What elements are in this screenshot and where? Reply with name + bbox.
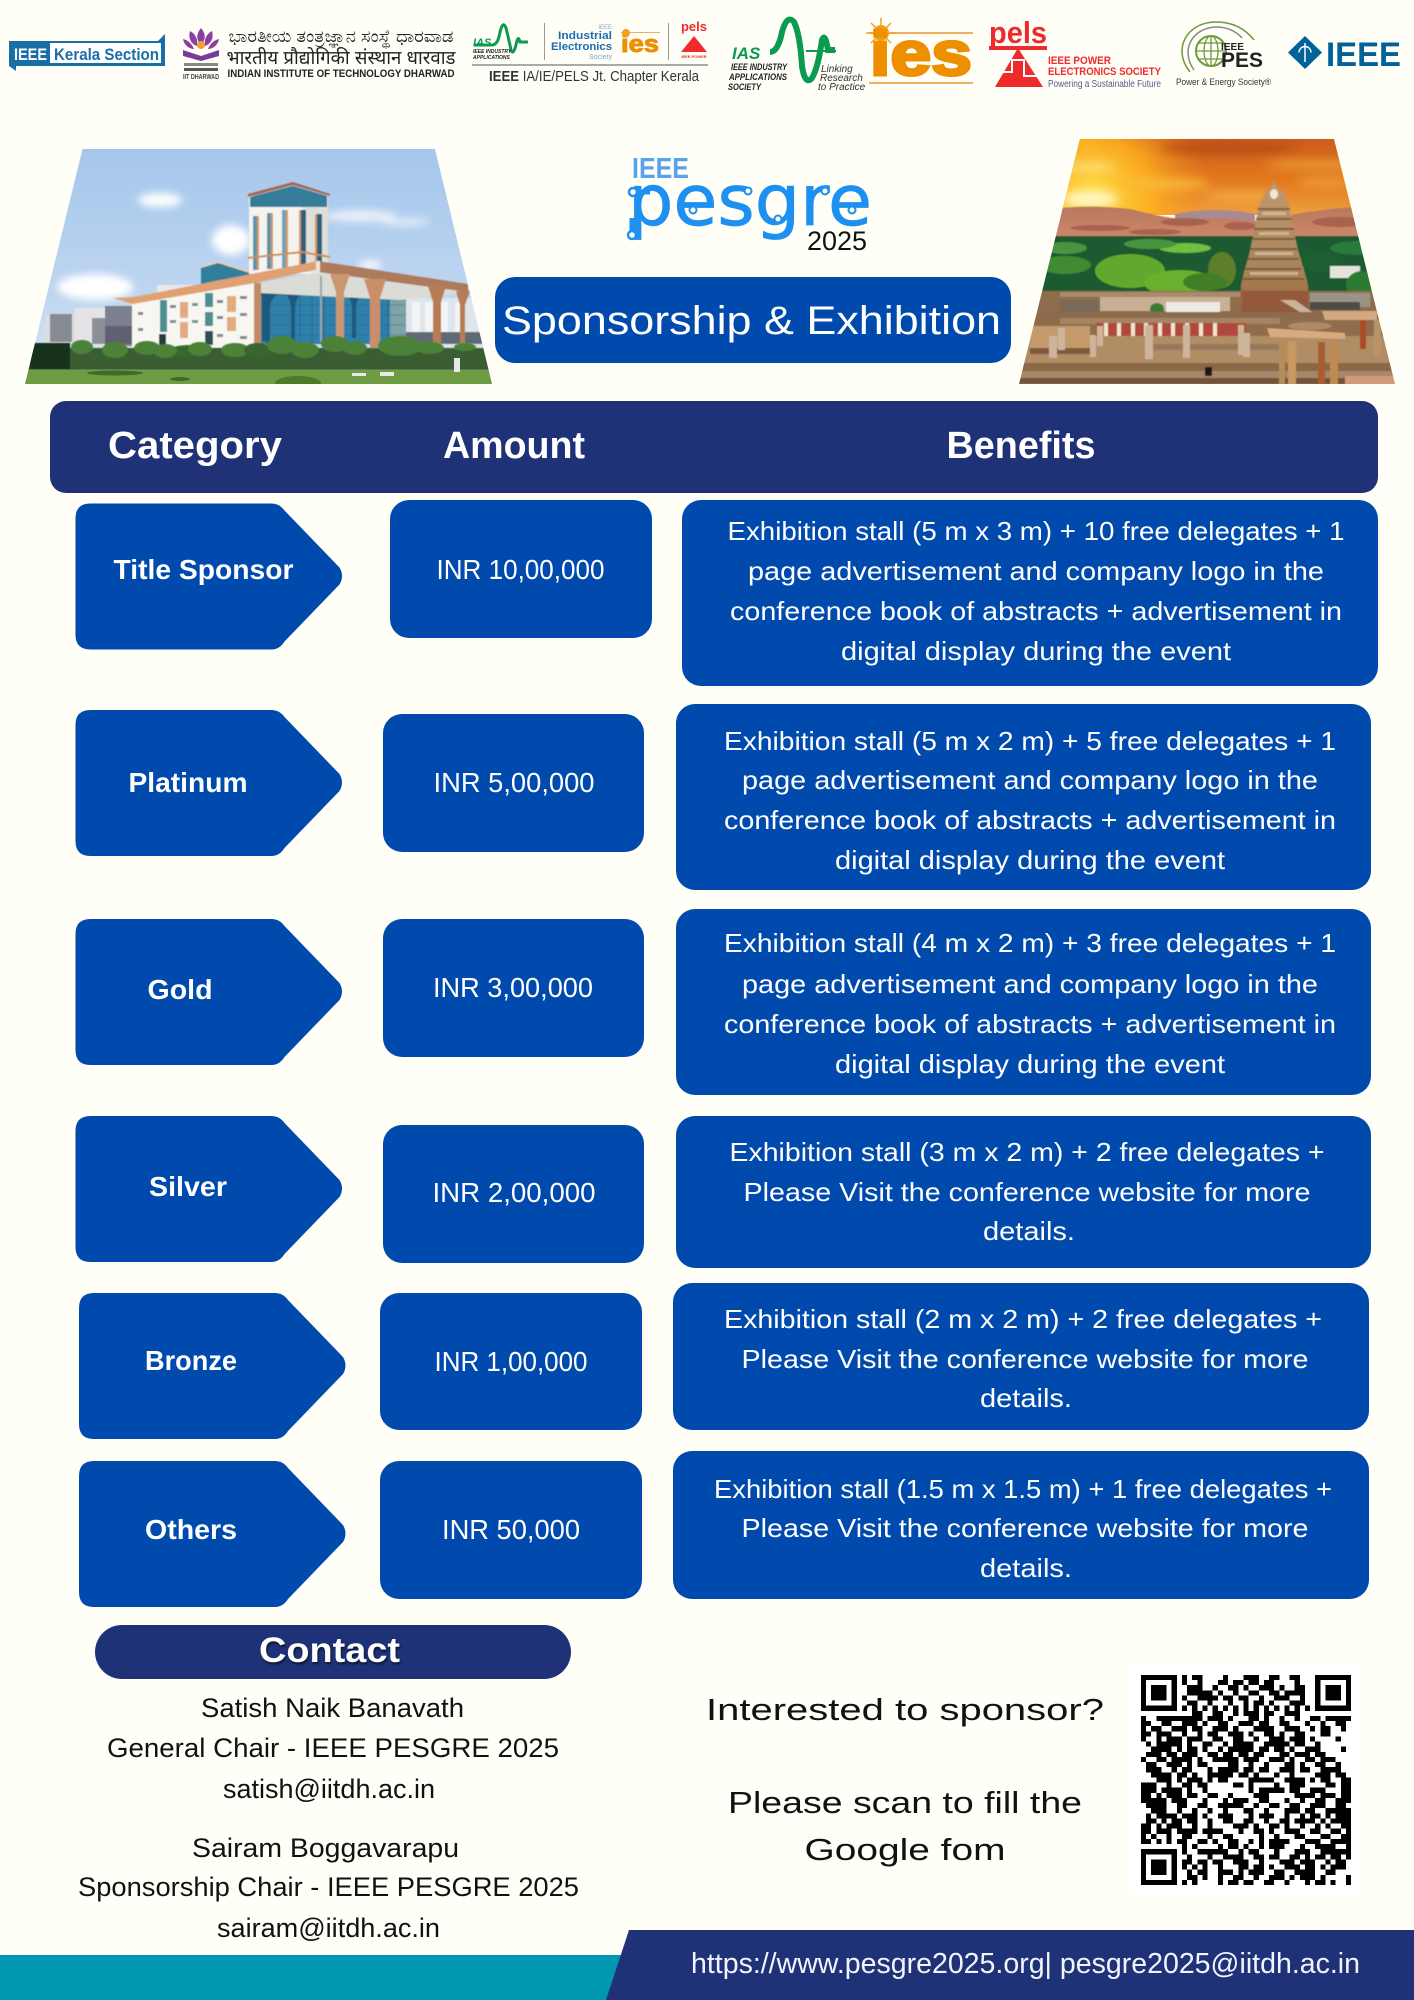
- category badge: Others: Others: [145, 1514, 237, 1545]
- row: Title Sponsor: [76, 500, 1378, 686]
- town and walls: [1033, 290, 1384, 337]
- logo: IEEE IA/IE/PELS Jt. Chapter Kerala: Industrial: [558, 30, 612, 42]
- logo: IIT Dharwad: भारतीय प्रौद्योगिकी संस्थान धारवाड: [226, 46, 456, 69]
- logo: IEEE IA/IE/PELS Jt. Chapter Kerala: IEEE IA/IE/PELS Jt. Chapter Kerala: [489, 68, 700, 85]
- amount: INR 50,000: INR 50,000: [442, 1514, 580, 1545]
- category badge: Title Sponsor: [76, 504, 342, 650]
- benefits: Title Sponsor: page advertisement and company logo in the: [748, 556, 1324, 586]
- canopy underside: [255, 272, 468, 300]
- amount: INR 1,00,000: [380, 1293, 642, 1430]
- benefits: Gold: Exhibition stall (4 m x 2 m) + 3 free delegates + 1: [724, 928, 1336, 958]
- logo: IEEE PESGRE 2025: 2025: [807, 226, 867, 256]
- row: Silver: [76, 1116, 1371, 1268]
- category badge: Platinum: Platinum: [128, 767, 248, 798]
- logo: IEEE PESGRE 2025: IEEE: [632, 153, 689, 185]
- contact: Satish Naik Banavath: General Chair - IEEE PESGRE 2025: [107, 1733, 559, 1763]
- category badge: Bronze: [79, 1293, 346, 1439]
- category badge: Bronze: Bronze: [145, 1345, 237, 1376]
- amount: INR 50,000: [380, 1461, 642, 1599]
- amount: INR 10,00,000: [390, 500, 652, 638]
- benefits: Platinum: Exhibition stall (5 m x 2 m) + 5 free delegates + 1: [724, 726, 1336, 756]
- benefits: Title Sponsor: conference book of abstracts + advertisement in: [730, 596, 1342, 626]
- logo: IEEE IA/IE/PELS Jt. Chapter Kerala: APPLICATIONS: [472, 55, 511, 61]
- table header bar: [50, 401, 1378, 493]
- benefits: Others: [673, 1451, 1369, 1599]
- benefits: Platinum: digital display during the event: [835, 845, 1226, 875]
- columns: [330, 274, 350, 345]
- logo: IEEE IA/IE/PELS Jt. Chapter Kerala: IEEE: [598, 25, 612, 31]
- logo: IEEE IA/IE/PELS Jt. Chapter Kerala: ies: [621, 31, 659, 58]
- logo: IEEE Kerala Section: IEEE: [14, 45, 47, 64]
- logo: IIT Dharwad: ಭಾರತೀಯ ತಂತ್ರಜ್ಞಾನ ಸಂಸ್ಥೆ ಧಾರವಾಡ: [228, 27, 454, 50]
- category badge: Gold: Gold: [148, 974, 212, 1005]
- contact: Satish Naik Banavath: satish@iitdh.ac.in: [223, 1774, 435, 1804]
- QR code: [1131, 1665, 1361, 1895]
- benefits: Bronze: Exhibition stall (2 m x 2 m) + 2 free delegates +: [724, 1304, 1322, 1334]
- logo: IEEE Kerala Section: Kerala Section: [54, 45, 159, 64]
- logo: IEEE IA/IE/PELS Jt. Chapter Kerala: Society: [589, 54, 612, 61]
- amount: INR 5,00,000: [383, 714, 644, 852]
- benefits: Bronze: [673, 1283, 1369, 1430]
- teal block: [200, 262, 250, 284]
- logo: IEEE IAS: Research: [820, 73, 863, 84]
- logo: IEEE PES: IEEE: [1221, 42, 1244, 53]
- benefits: Gold: digital display during the event: [835, 1049, 1226, 1079]
- category badge: Silver: Silver: [149, 1171, 227, 1202]
- logo: PELS: pels: [989, 15, 1047, 50]
- category badge: Gold: [76, 919, 342, 1065]
- logo: IEEE IA/IE/PELS Jt. Chapter Kerala: pels: [681, 19, 707, 34]
- title banner: Sponsorship & Exhibition: Sponsorship & Exhibition: [502, 299, 1001, 343]
- title banner: Sponsorship & Exhibition: [495, 277, 1011, 363]
- benefits: Gold: page advertisement and company logo in the: [742, 969, 1318, 999]
- benefits: Platinum: conference book of abstracts + advertisement in: [724, 805, 1336, 835]
- amount: INR 1,00,000: INR 1,00,000: [434, 1346, 588, 1377]
- logo: IEEE IA/IE/PELS Jt. Chapter Kerala: Electronics: [551, 41, 612, 53]
- logo: IEEE: [1288, 36, 1401, 74]
- tower: [248, 195, 316, 275]
- footer band: [0, 1930, 1414, 2000]
- benefits: Silver: Please Visit the conference website for more: [744, 1177, 1310, 1207]
- contact: Sairam Boggavarapu: sairam@iitdh.ac.in: [217, 1913, 440, 1943]
- logo: PELS: [989, 15, 1162, 90]
- benefits: Title Sponsor: [682, 500, 1378, 686]
- row: Platinum: [76, 704, 1371, 890]
- contact: Sairam Boggavarapu: Sairam Boggavarapu: [192, 1833, 459, 1863]
- footer: website and email: https://www.pesgre2025.org| pesgre2025@iitdh.ac.in: [691, 1948, 1360, 1980]
- row: Others: [79, 1451, 1369, 1607]
- logo: IEEE IAS: to Practice: [818, 82, 866, 93]
- benefits: Bronze: Please Visit the conference website for more: [742, 1344, 1308, 1374]
- logo: IEEE IA/IE/PELS Jt. Chapter Kerala: IAS: [473, 37, 492, 49]
- amount: INR 5,00,000: INR 5,00,000: [434, 767, 594, 798]
- logo: IEEE IA/IE/PELS Jt. Chapter Kerala: [472, 19, 708, 85]
- stone courtyard: [1015, 336, 1400, 386]
- tree band: [20, 348, 500, 370]
- benefits: Others: Please Visit the conference website for more: [742, 1513, 1308, 1543]
- benefits: Silver: [676, 1116, 1371, 1268]
- header: Category: Category: [108, 425, 282, 467]
- amount: INR 2,00,000: INR 2,00,000: [432, 1177, 596, 1208]
- row: Gold: [76, 909, 1371, 1095]
- benefits: Gold: conference book of abstracts + advertisement in: [724, 1009, 1336, 1039]
- call to action text: [706, 1692, 1104, 1867]
- contact: Sairam Boggavarapu: Sponsorship Chair - IEEE PESGRE 2025: [78, 1872, 579, 1902]
- logo: IEEE PESGRE 2025: pesgre: [628, 160, 872, 242]
- contact heading pill: Contact: [259, 1631, 400, 1670]
- amount: INR 3,00,000: [383, 919, 644, 1057]
- logo: PELS: Powering a Sustainable Future: [1048, 79, 1161, 90]
- logo: IEEE Kerala Section: [9, 34, 165, 71]
- logo: IEEE PES: [1176, 22, 1271, 88]
- main white block: [132, 283, 255, 348]
- logo: IIT Dharwad: INDIAN INSTITUTE OF TECHNOLOGY DHARWAD: [228, 68, 455, 80]
- amount: INR 10,00,000: INR 10,00,000: [436, 554, 604, 585]
- logo: IEEE: IEEE: [1326, 36, 1401, 74]
- logo: IEEE IAS: Linking: [821, 64, 853, 75]
- far left buildings: [45, 314, 75, 346]
- category badge: Silver: [76, 1116, 342, 1262]
- red and white colonnade: [1096, 323, 1246, 336]
- logo: PELS: IEEE POWER: [1048, 55, 1111, 67]
- benefits: Gold: [676, 909, 1371, 1095]
- header: Benefits: Benefits: [946, 425, 1096, 467]
- logo: IEEE PES: PES: [1221, 49, 1263, 72]
- logo: IEEE IA/IE/PELS Jt. Chapter Kerala: IEEE INDUSTRY: [473, 49, 512, 55]
- contact heading pill: [95, 1625, 571, 1679]
- benefits: Platinum: page advertisement and company logo in the: [742, 765, 1318, 795]
- benefits: Silver: details.: [983, 1216, 1075, 1246]
- amount: INR 3,00,000: INR 3,00,000: [433, 972, 593, 1003]
- logo: IEEE PES: Power & Energy Society®: [1176, 77, 1271, 88]
- contact: Satish Naik Banavath: [107, 1693, 559, 1804]
- logo: IEEE IAS: [728, 20, 866, 93]
- logo: IEEE IAS: APPLICATIONS: [728, 72, 787, 82]
- category badge: Others: [79, 1461, 346, 1607]
- right white block: [405, 298, 483, 348]
- photo: Hampi temple at sunset: [1015, 135, 1400, 386]
- benefits: Silver: Exhibition stall (3 m x 2 m) + 2 free delegates +: [730, 1137, 1324, 1167]
- logo: IEEE IAS: IEEE INDUSTRY: [731, 62, 788, 72]
- benefits: Others: details.: [980, 1553, 1072, 1583]
- atrium glass: [260, 294, 391, 345]
- call to action text: Google fom: [804, 1832, 1006, 1867]
- category badge: Platinum: [76, 710, 342, 856]
- benefits: Bronze: details.: [980, 1383, 1072, 1413]
- logo: IIT Dharwad: IIT DHARWAD: [183, 74, 219, 81]
- logo strip: [9, 15, 1401, 93]
- logo: IEEE IAS: SOCIETY: [728, 82, 762, 92]
- temple tower: [1241, 181, 1308, 312]
- benefits: Platinum: [676, 704, 1371, 890]
- contact: Satish Naik Banavath: Satish Naik Banavath: [201, 1693, 464, 1723]
- header: Amount: Amount: [443, 425, 585, 467]
- stone pavilions: [1322, 311, 1377, 320]
- logo: IEEE IAS: IAS: [732, 44, 761, 63]
- benefits: Title Sponsor: Exhibition stall (5 m x 3 m) + 10 free delegates + 1: [728, 516, 1344, 546]
- category badge: Title Sponsor: Title Sponsor: [114, 554, 294, 585]
- logo: IEEE IA/IE/PELS Jt. Chapter Kerala: IEEE POWER: [681, 54, 707, 59]
- logo: PELS: ELECTRONICS SOCIETY: [1048, 66, 1162, 78]
- amount: INR 2,00,000: [383, 1125, 644, 1263]
- call to action text: Interested to sponsor?: [706, 1692, 1104, 1727]
- call to action text: Please scan to fill the: [728, 1785, 1082, 1820]
- benefits: Title Sponsor: digital display during the event: [841, 636, 1232, 666]
- benefits: Others: Exhibition stall (1.5 m x 1.5 m) + 1 free delegates +: [714, 1474, 1332, 1504]
- photo: IIT Dharwad campus building: [20, 149, 500, 390]
- logo: IIT Dharwad: [183, 27, 456, 81]
- contact panel: [78, 1625, 579, 1943]
- contact: Sairam Boggavarapu: [78, 1833, 579, 1943]
- row: Bronze: [79, 1283, 1369, 1439]
- logo: IES: ies: [870, 20, 972, 89]
